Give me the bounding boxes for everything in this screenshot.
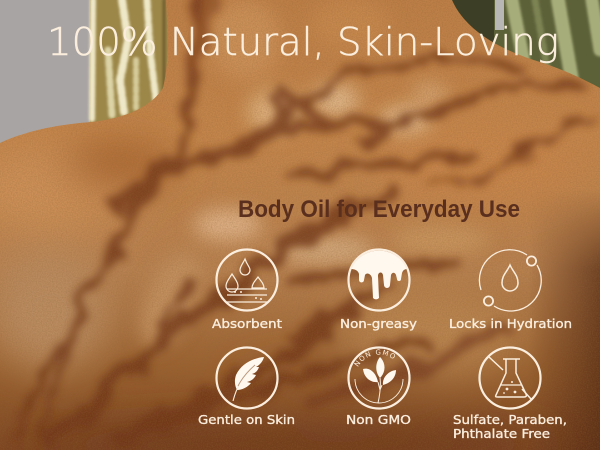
icon: non gmo	[347, 346, 411, 410]
icon: absorbent	[216, 250, 278, 310]
icon: non-greasy drips	[348, 250, 410, 310]
icon: locks in hydration	[479, 250, 541, 311]
right-side shadow	[536, 197, 600, 450]
icon: non gmo: NON GMO	[354, 349, 395, 367]
label: sulfate paraben phthalate free: Phthalate Free	[453, 426, 550, 441]
braids: left blond	[90, 0, 168, 125]
label: absorbent: Absorbent	[212, 316, 282, 331]
title: 100% Natural, Skin-Loving	[47, 20, 559, 64]
label: locks in hydration: Locks in Hydration	[449, 316, 572, 331]
label: non gmo: Non GMO	[346, 412, 411, 427]
label: sulfate paraben phthalate free	[453, 412, 567, 441]
heading: Body Oil for Everyday Use	[238, 196, 520, 223]
label: non-greasy: Non-greasy	[340, 316, 418, 331]
label: gentle on skin: Gentle on Skin	[198, 412, 295, 427]
icon: feather	[216, 348, 278, 408]
braids: right green	[450, 0, 600, 95]
label: sulfate paraben phthalate free: Sulfate, Paraben,	[453, 412, 567, 427]
icon: flask prohibited	[480, 348, 540, 408]
